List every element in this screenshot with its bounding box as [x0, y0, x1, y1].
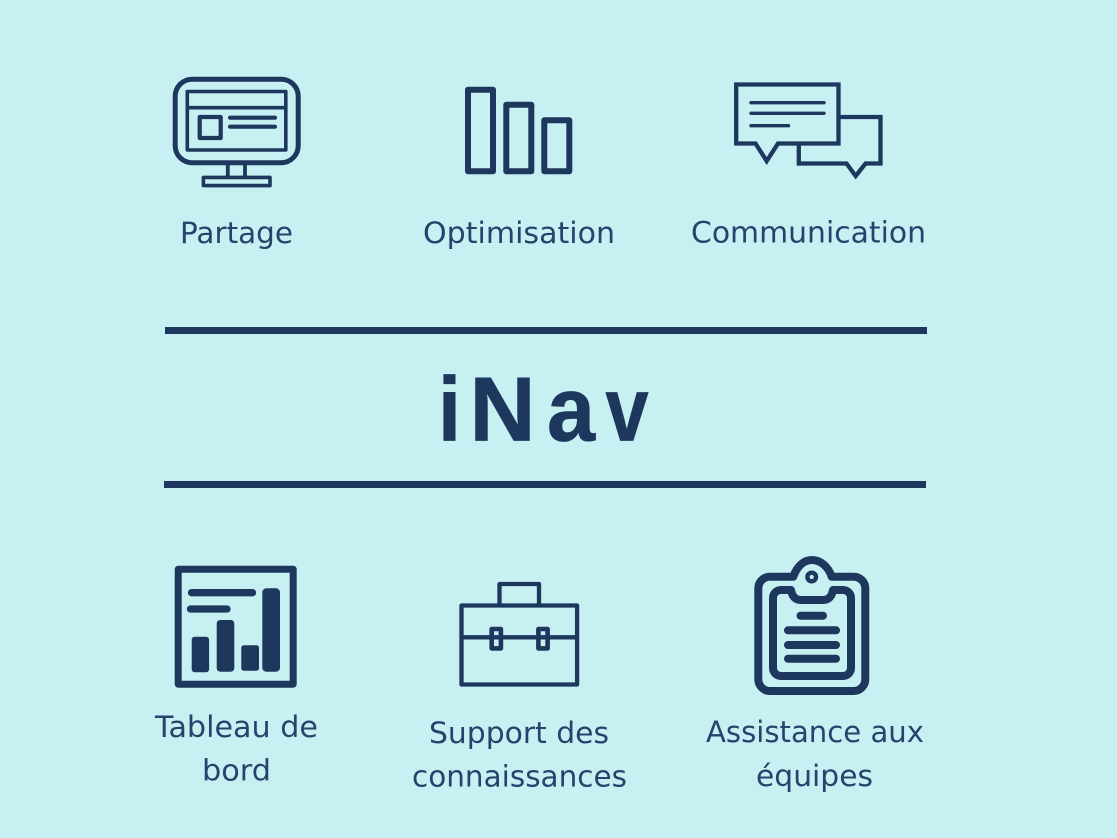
title: v: [606, 360, 649, 461]
divider: bottom: [164, 481, 926, 488]
icon: briefcase: [461, 584, 577, 684]
title: N: [470, 360, 536, 461]
label: Tableau de bord: bord: [202, 754, 271, 788]
title: i: [438, 360, 461, 461]
label: Communication: Communication: [691, 216, 926, 250]
label: Tableau de bord: [154, 710, 318, 788]
label: Assistance aux équipes: [706, 715, 924, 793]
label: Optimisation: Optimisation: [423, 216, 615, 250]
icon: monitor: [175, 79, 298, 186]
title: a: [547, 360, 596, 461]
divider: top: [165, 327, 927, 334]
icon: clipboard: [758, 560, 865, 691]
label: Support des connaissances: connaissances: [412, 760, 627, 794]
label: Tableau de bord: Tableau de: [154, 710, 318, 744]
label: Support des connaissances: [412, 716, 627, 794]
label: Assistance aux équipes: équipes: [756, 759, 873, 793]
label: Partage: Partage: [180, 216, 293, 250]
label: Support des connaissances: Support des: [429, 716, 609, 750]
title: [438, 360, 649, 461]
icon: dashboard: [178, 569, 293, 684]
label: Assistance aux équipes: Assistance aux: [706, 715, 924, 749]
icon: speech bubbles: [736, 84, 880, 176]
icon: bars: [468, 90, 569, 171]
